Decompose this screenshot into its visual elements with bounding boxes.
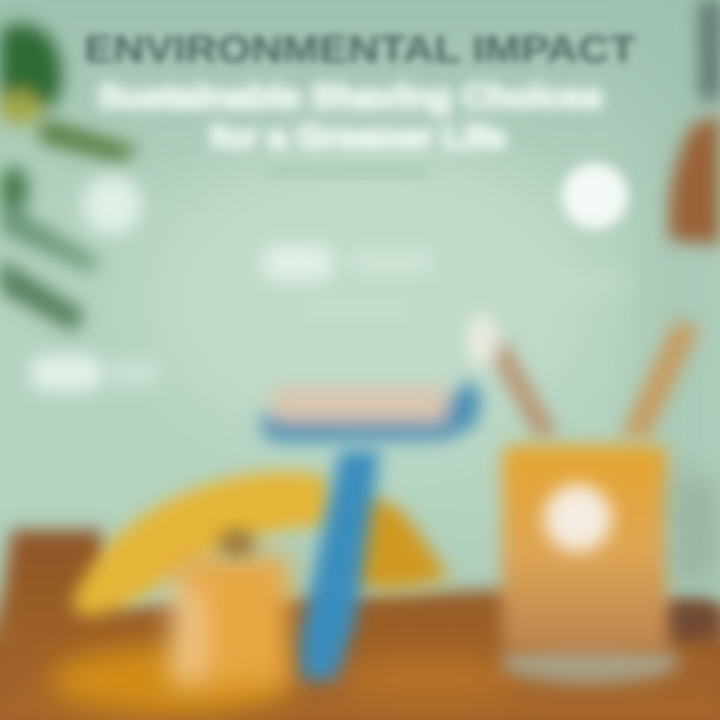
table bbox=[0, 530, 720, 720]
title: ENVIRONMENTAL IMPACT bbox=[84, 29, 636, 71]
label: left bbox=[30, 355, 158, 391]
subtitle: for a Greener Life bbox=[210, 119, 506, 155]
caption under subtitle bbox=[265, 165, 430, 177]
razor bbox=[262, 380, 482, 680]
small orange bottle bbox=[172, 555, 290, 685]
razor head bbox=[262, 380, 482, 442]
razor handle bbox=[300, 450, 380, 680]
icon: left circle bbox=[82, 175, 142, 235]
glass logo bbox=[544, 484, 612, 552]
label: centre bbox=[262, 245, 435, 316]
brown object top right bbox=[669, 0, 720, 245]
icon: right circle bbox=[562, 163, 628, 229]
toothbrushes bbox=[466, 314, 700, 440]
glass handle shadow bbox=[670, 470, 720, 590]
subtitle: Sustainable Shaving Choices bbox=[98, 78, 602, 116]
label: right bbox=[510, 268, 630, 298]
banana bbox=[72, 471, 450, 616]
plant leaves bbox=[0, 24, 140, 332]
bottle cap bbox=[219, 529, 255, 557]
glass bbox=[500, 445, 680, 684]
subtitle bbox=[98, 78, 602, 155]
